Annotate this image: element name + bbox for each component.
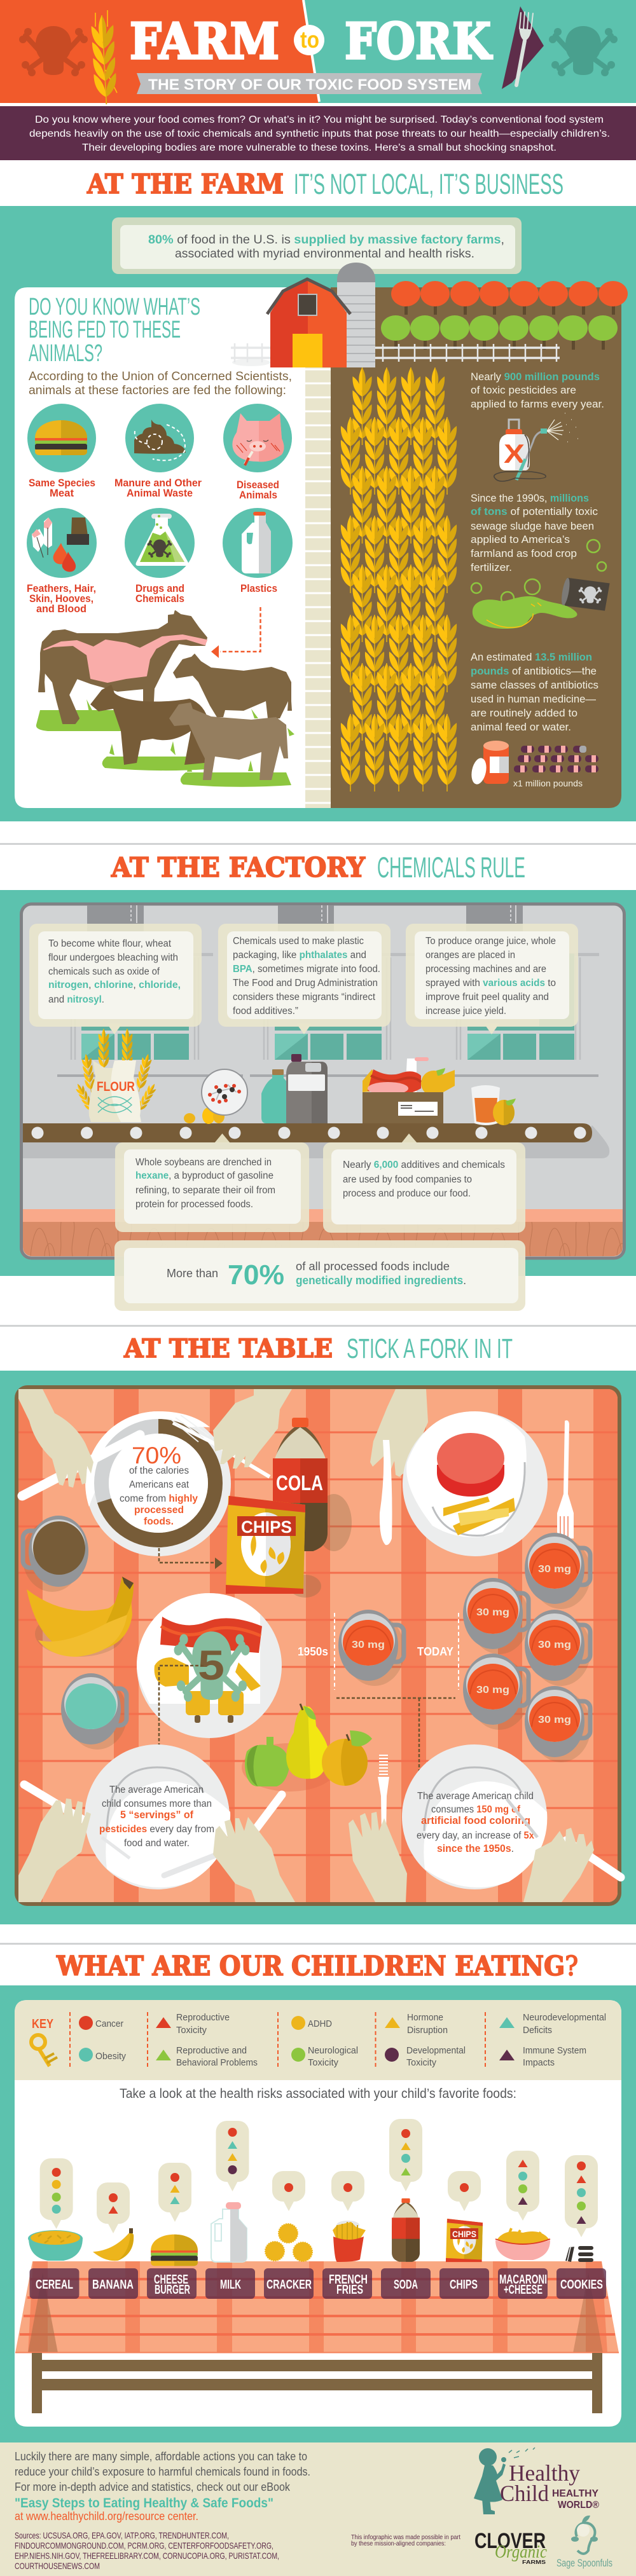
callout: 6,000 additives: Nearly 6,000 additives and chemicals bbox=[343, 1160, 505, 1170]
plate: pesticides text: child consumes more than bbox=[102, 1798, 212, 1809]
icon: hand bottom right bbox=[523, 1828, 594, 1902]
icon: today cup B bbox=[463, 1578, 529, 1654]
panel: left white bbox=[15, 287, 305, 808]
arrow: plate to pesticides bbox=[153, 1666, 204, 1781]
legend: key: Deficits bbox=[523, 2025, 552, 2036]
road strip bbox=[305, 367, 331, 808]
text: antibiotics: pounds of antibiotics—the bbox=[471, 665, 597, 677]
callout: 70 percent GMO: genetically modified ingredients. bbox=[296, 1274, 466, 1287]
table legs bbox=[32, 2353, 602, 2413]
callout: soybeans: protein for processed foods. bbox=[135, 1199, 253, 1210]
food labels: CHIPS bbox=[450, 2278, 478, 2292]
text: union of concerned scientists bbox=[29, 370, 292, 397]
food: soda bbox=[392, 2198, 420, 2262]
legend: key bbox=[15, 2000, 621, 2080]
icon: toxic barrel and slime bbox=[471, 540, 610, 629]
text: pesticides: of toxic pesticides are bbox=[471, 384, 576, 396]
heading: at the farm bbox=[86, 168, 563, 200]
food: macaroni and cheese bowl bbox=[495, 2228, 550, 2260]
callout: soybeans: Whole soybeans are drenched in bbox=[135, 1157, 272, 1168]
icon: chips bag bbox=[226, 1496, 321, 1598]
legend: key: ADHD bbox=[308, 2018, 332, 2029]
icon: hand bottom middle-right bbox=[349, 1812, 407, 1902]
food labels: FRIES bbox=[336, 2283, 363, 2297]
icon: box of food bbox=[363, 1057, 455, 1123]
legend: key: Toxicity bbox=[308, 2057, 338, 2068]
badge: to bbox=[294, 25, 324, 55]
legend: key: Impacts bbox=[523, 2057, 555, 2068]
callout: white flour: flour undergoes bleaching with bbox=[48, 952, 178, 963]
food labels bbox=[29, 2268, 606, 2299]
icon: skull left bbox=[19, 26, 88, 76]
text: union of concerned scientists: According to the Union of Concerned Scientists, bbox=[29, 370, 292, 383]
labels: row one: Animals bbox=[239, 489, 277, 501]
callout: 70 percent GMO: of all processed foods include bbox=[296, 1260, 450, 1273]
callout: orange juice: sprayed with various acids to bbox=[425, 978, 556, 989]
text: antibiotics: are routinely added to bbox=[471, 707, 577, 719]
plate: pesticides text: The average American bbox=[109, 1785, 204, 1795]
icon: plastics jug bbox=[223, 508, 293, 578]
legend: key: Behavioral Problems bbox=[176, 2057, 258, 2068]
text: take a look: Take a look at the health risks associated with your child’s favorite foods: bbox=[120, 2086, 516, 2101]
text: sewage sludge: applied to America’s bbox=[471, 533, 570, 545]
plate: food coloring text bbox=[402, 1744, 547, 1889]
tablecloth bbox=[15, 1385, 621, 1906]
text: sewage sludge bbox=[471, 492, 598, 573]
cutlery: top left plate bbox=[22, 1415, 270, 1496]
text: sources bbox=[15, 2530, 279, 2571]
icon: hand bottom middle-left bbox=[213, 1817, 295, 1902]
text: sponsors note: by these mission-aligned companies: bbox=[351, 2540, 446, 2547]
icon: today cup A bbox=[525, 1533, 591, 1609]
callout: plastic packaging: The Food and Drug Administration bbox=[233, 978, 378, 989]
icon: wheat bbox=[91, 10, 118, 105]
heading: at the factory bbox=[0, 843, 636, 884]
logo: clover organic farms: FARMS bbox=[522, 2559, 546, 2565]
text: 70 percent calories: of the calories bbox=[129, 1465, 189, 1476]
food labels: CHEESE bbox=[154, 2273, 188, 2287]
cutlery: bottom settings bbox=[24, 1755, 621, 1877]
plate: calories chart bbox=[85, 1411, 231, 1556]
logo: sage spoonfuls bbox=[556, 2516, 612, 2569]
title: FORK: FORK bbox=[345, 13, 493, 71]
food: cookies bbox=[565, 2246, 593, 2262]
plate: food coloring text: consumes 150 mg of bbox=[431, 1804, 521, 1815]
text: sources: EHP.NIEHS.NIH.GOV, THEFREELIBRARY.COM, CORNUCOPIA.ORG, PURISTAT.COM, bbox=[15, 2551, 279, 2561]
icon: feathers, hair, blood bbox=[27, 508, 97, 578]
icon: cola bottle: COLA bbox=[276, 1471, 323, 1495]
callout: plastic packaging: Chemicals used to make plastic bbox=[233, 936, 364, 947]
windows bbox=[64, 953, 599, 1060]
text: 70 percent calories: Americans eat bbox=[129, 1479, 190, 1490]
labels: row one: Animal Waste bbox=[127, 487, 193, 499]
risk bubble: cheeseburger bbox=[158, 2163, 191, 2222]
illustration: factory room bbox=[22, 904, 625, 1258]
callout: 80 percent: 80% of food in the U.S. is supplied by massive factory farms , bbox=[148, 233, 504, 247]
arrow: feed to cow bbox=[211, 607, 261, 658]
legend: key: Disruption bbox=[407, 2025, 448, 2036]
labels: row one: Meat bbox=[50, 487, 74, 499]
logo: healthy child healthy world bbox=[474, 2448, 600, 2514]
text: sponsors note: This infographic was made possible in part bbox=[351, 2533, 460, 2541]
food: cereal bowl bbox=[28, 2230, 83, 2261]
callout: white flour: To become white flour, wheat bbox=[48, 938, 172, 949]
risk bubble: french fries bbox=[331, 2171, 364, 2211]
food: cheeseburger bbox=[151, 2235, 198, 2266]
text: antibiotics: animal feed or water. bbox=[471, 721, 571, 733]
labels: row two: Chemicals bbox=[135, 593, 184, 605]
cow: large with meat diagram bbox=[39, 611, 207, 723]
risk bubble: cereal bbox=[40, 2158, 73, 2229]
callout: plastic packaging: packaging, like phthalates and bbox=[233, 950, 366, 961]
cow: right bbox=[173, 654, 292, 718]
text: antibiotics: used in human medicine— bbox=[471, 693, 596, 705]
callout: 70 percent GMO bbox=[114, 1240, 525, 1311]
icon: water cup bbox=[61, 1673, 127, 1750]
trees bbox=[381, 281, 628, 350]
heading: at the table: AT THE TABLE bbox=[123, 1334, 333, 1364]
wheat field bbox=[341, 367, 457, 791]
labels: row two bbox=[27, 582, 277, 615]
food: chips bbox=[446, 2219, 483, 2262]
text: pesticides: Nearly 900 million pounds bbox=[471, 371, 600, 383]
callout: soybeans bbox=[115, 1134, 309, 1232]
icon: skull right bbox=[549, 26, 618, 76]
text: 70 percent calories: 70% bbox=[132, 1442, 181, 1469]
risk bubble: soda bbox=[389, 2119, 422, 2191]
legend: key: KEY bbox=[32, 2017, 54, 2031]
icon: flour sack with wheat bbox=[74, 1029, 158, 1122]
callout: plastic packaging: considers these migrants “indirect bbox=[233, 992, 376, 1003]
text: 70 percent calories bbox=[120, 1442, 198, 1527]
legend: key: Neurodevelopmental bbox=[523, 2012, 606, 2023]
intro text band: depends heavily on the use of toxic chemicals and synthetic inputs that pose threats to our health—especially children’s. bbox=[29, 128, 610, 139]
food: crackers bbox=[265, 2224, 312, 2261]
food labels: MACARONI bbox=[499, 2273, 547, 2287]
text: antibiotics bbox=[471, 651, 598, 733]
badge: to: to bbox=[300, 27, 319, 53]
food labels: SODA bbox=[394, 2278, 418, 2292]
text: call to action: Luckily there are many simple, affordable actions you can take to bbox=[15, 2450, 307, 2463]
arrow: to processed foods bbox=[159, 1548, 223, 1569]
logo: clover organic farms: CLOVER bbox=[474, 2529, 546, 2553]
panel: factory background bbox=[0, 890, 636, 1276]
text: pesticides bbox=[471, 371, 604, 410]
text: sources: COURTHOUSENEWS.COM bbox=[15, 2561, 100, 2571]
text: call to action bbox=[15, 2450, 310, 2523]
labels: row one: Manure and Other bbox=[114, 477, 202, 489]
callout: 6,000 additives: process and produce our food. bbox=[343, 1188, 471, 1199]
risk bubble: cookies bbox=[565, 2155, 598, 2237]
food labels: BURGER bbox=[155, 2283, 190, 2297]
food labels: COOKIES bbox=[560, 2278, 603, 2292]
icon: hand top right bbox=[370, 1389, 428, 1477]
text: sewage sludge: sewage sludge have been bbox=[471, 520, 594, 532]
food labels: BANANA bbox=[92, 2278, 134, 2292]
callout: plastic packaging bbox=[218, 924, 391, 1034]
text: 70 percent calories: foods. bbox=[144, 1516, 174, 1527]
callout: orange juice: To produce orange juice, whole bbox=[425, 936, 556, 947]
arrow: cups to food coloring bbox=[336, 1698, 455, 1786]
risk bubble: chips bbox=[448, 2171, 481, 2211]
icon: chemical jugs bbox=[261, 1054, 328, 1123]
illustration: cows on grass bbox=[36, 611, 294, 787]
panel: white card bbox=[15, 2000, 621, 2427]
legend: key: Reproductive and bbox=[176, 2045, 247, 2056]
icon: today cup C bbox=[525, 1610, 591, 1686]
text: call to action: reduce your child’s exposure to harmful chemicals found in foods. bbox=[15, 2465, 310, 2478]
labels: row one bbox=[29, 477, 279, 501]
text: sewage sludge: of tons of potentially toxic bbox=[471, 505, 598, 517]
logo: clover organic farms bbox=[474, 2529, 547, 2565]
plate: pesticides text: 5 “servings” of bbox=[120, 1809, 193, 1821]
legend: key: Hormone bbox=[407, 2012, 443, 2023]
legend: key: Developmental bbox=[406, 2045, 466, 2056]
heading: at the table: STICK A FORK IN IT bbox=[347, 1333, 513, 1364]
labels: row two: Drugs and bbox=[135, 582, 184, 594]
callout: soybeans: hexane, a byproduct of gasoline bbox=[135, 1170, 273, 1181]
heading: at the factory: CHEMICALS RULE bbox=[377, 851, 525, 884]
callout: 80 percent: associated with myriad environmental and health risks. bbox=[175, 247, 474, 261]
icon: same species meat bbox=[27, 404, 96, 472]
callout: 80 percent bbox=[112, 217, 522, 274]
conveyor belt bbox=[23, 1123, 592, 1142]
icon: pill bottle and pills bbox=[469, 741, 598, 786]
callout: white flour bbox=[29, 924, 202, 1034]
plate: burger and fries bbox=[403, 1411, 548, 1556]
heading: at the table bbox=[0, 1325, 636, 1364]
subtitle ribbon: THE STORY OF OUR TOXIC FOOD SYSTEM bbox=[148, 76, 471, 93]
labels: row two: and Blood bbox=[36, 603, 86, 615]
plate: pesticides text: food and water. bbox=[124, 1838, 190, 1849]
logo: healthy child healthy world: WORLD® bbox=[558, 2500, 600, 2511]
logo: sage spoonfuls: Sage Spoonfuls bbox=[556, 2557, 612, 2569]
icon: bananas bbox=[27, 1577, 134, 1657]
labels: row two: Plastics bbox=[240, 582, 277, 594]
callout: white flour: and nitrosyl. bbox=[48, 994, 104, 1005]
panel: farm background bbox=[0, 206, 636, 821]
callout: orange juice: increase juice yield. bbox=[425, 1006, 506, 1017]
text: call to action: For more in-depth advice and statistics, check out our eBook bbox=[15, 2481, 291, 2493]
food: milk bbox=[211, 2202, 247, 2262]
callout: orange juice bbox=[406, 924, 578, 1034]
logo: clover organic farms: Organic bbox=[495, 2542, 547, 2562]
icon: 1950s cup: 30 mg bbox=[352, 1640, 385, 1650]
text: 70 percent calories: processed bbox=[134, 1505, 184, 1516]
text: sources: Sources: UCSUSA.ORG, EPA.GOV, IATP.ORG, TRENDHUNTER.COM, bbox=[15, 2530, 229, 2540]
icon: today cup E: 30 mg bbox=[538, 1715, 571, 1725]
title: FARM: FARM bbox=[130, 13, 279, 71]
logo: healthy child healthy world: HEALTHY bbox=[552, 2488, 599, 2499]
callout: white flour: nitrogen, chlorine, chloride, bbox=[48, 980, 181, 990]
panel: table background bbox=[0, 1371, 636, 1924]
legend: key: Obesity bbox=[95, 2051, 126, 2062]
heading: feed question: BEING FED TO THESE bbox=[29, 317, 181, 343]
cow: middle bbox=[90, 685, 209, 765]
text: sewage sludge: fertilizer. bbox=[471, 561, 512, 573]
intro text band: Do you know where your food comes from? Or what’s in it? You might be surprised. Today’s conventional food system bbox=[35, 114, 604, 125]
icon: today cup C: 30 mg bbox=[538, 1640, 571, 1650]
icon: hand top left bbox=[18, 1389, 93, 1488]
risk bubble: banana bbox=[97, 2182, 130, 2233]
legend: key: Immune System bbox=[523, 2045, 586, 2056]
icon: molecule circle and soybeans bbox=[184, 1069, 247, 1124]
icon: cola bottle bbox=[273, 1418, 352, 1551]
icon: today cup D: 30 mg bbox=[476, 1685, 509, 1696]
risk bubble: cracker bbox=[272, 2171, 305, 2211]
food: banana bbox=[93, 2228, 134, 2261]
callout: orange juice: improve fruit peel quality and bbox=[425, 992, 549, 1003]
risk bubble: macaroni and cheese bbox=[506, 2151, 539, 2221]
logo: healthy child healthy world: Child bbox=[500, 2481, 549, 2506]
icon: drugs and chemicals flask bbox=[125, 508, 195, 578]
panel: children's section background bbox=[0, 1985, 636, 2442]
plate: five servings bbox=[137, 1593, 282, 1738]
icon: flour sack with wheat: FLOUR bbox=[97, 1079, 135, 1094]
plate: food coloring text: The average American child bbox=[417, 1791, 534, 1802]
icon: pesticide sprayer bbox=[494, 413, 578, 481]
labels: row one: Diseased bbox=[237, 479, 279, 491]
plate: food coloring text: every day, an increase of 5x bbox=[417, 1830, 534, 1841]
silo bbox=[337, 263, 375, 367]
plate: pesticides text: pesticides every day from bbox=[99, 1824, 214, 1835]
legend: key: Cancer bbox=[95, 2018, 123, 2029]
legend: key: Neurological bbox=[308, 2045, 358, 2056]
callout: plastic packaging: food additives.” bbox=[233, 1006, 298, 1017]
heading: feed question: DO YOU KNOW WHAT’S bbox=[29, 294, 200, 320]
text: union of concerned scientists: animals at these factories are fed the following: bbox=[29, 384, 286, 397]
callout: 6,000 additives bbox=[323, 1134, 525, 1233]
legend: key: Toxicity bbox=[176, 2025, 207, 2036]
cow: front light bbox=[169, 702, 288, 780]
icon: today cup D bbox=[463, 1654, 529, 1730]
text: sponsors note bbox=[351, 2533, 460, 2547]
icon: manure bbox=[125, 404, 194, 472]
heading: feed question: ANIMALS? bbox=[29, 340, 102, 367]
icon: diseased pig bbox=[223, 404, 292, 472]
icon: today cup B: 30 mg bbox=[476, 1607, 509, 1618]
callout: 70 percent GMO: 70% bbox=[228, 1259, 284, 1291]
text: call to action: at www.healthychild.org/resource center. bbox=[15, 2510, 198, 2523]
cutlery: knife and fork right plate bbox=[380, 1420, 574, 1545]
plate: food coloring text: since the 1950s. bbox=[437, 1843, 514, 1854]
heading: what are our children eating bbox=[0, 1943, 636, 1982]
fence bbox=[231, 343, 560, 366]
legend: key: Toxicity bbox=[406, 2057, 436, 2068]
heading: at the factory: AT THE FACTORY bbox=[111, 852, 366, 883]
callout: orange juice: oranges are placed in bbox=[425, 950, 515, 961]
labels: 1950s and today: TODAY bbox=[417, 1645, 453, 1658]
icon: hand bottom left bbox=[18, 1798, 91, 1902]
food labels: +CHEESE bbox=[504, 2283, 543, 2297]
icon: today cup A: 30 mg bbox=[538, 1564, 571, 1575]
food: french fries bbox=[333, 2221, 366, 2262]
icon: juice and orange bbox=[471, 1085, 516, 1125]
icon: pepper, pear and orange bbox=[242, 1704, 372, 1792]
food: chips: CHIPS bbox=[452, 2229, 476, 2239]
labels: row one: Same Species bbox=[29, 477, 95, 489]
legend: pill scale: x1 million pounds bbox=[513, 778, 583, 788]
food labels: CEREAL bbox=[36, 2278, 73, 2292]
text: call to action: "Easy Steps to Eating Healthy & Safe Foods" bbox=[15, 2496, 273, 2511]
header band bbox=[0, 0, 636, 105]
intro text band bbox=[0, 106, 636, 160]
text: antibiotics: same classes of antibiotics bbox=[471, 679, 598, 691]
text: pesticides: applied to farms every year. bbox=[471, 398, 604, 410]
logo: healthy child healthy world: Healthy bbox=[509, 2460, 580, 2486]
icon: coffee cup bbox=[22, 1516, 88, 1592]
heading: what are our children eating: WHAT ARE OUR CHILDREN EATING? bbox=[56, 1950, 578, 1982]
callout: plastic packaging: BPA, sometimes migrate into food. bbox=[233, 964, 380, 975]
food labels: CRACKER bbox=[266, 2278, 312, 2292]
callout: orange juice: processing machines and are bbox=[425, 964, 546, 975]
text: sewage sludge: Since the 1990s, millions bbox=[471, 492, 589, 504]
food labels: FRENCH bbox=[329, 2273, 368, 2287]
plate: five servings: 5 bbox=[198, 1641, 225, 1689]
plate: pesticides text bbox=[85, 1744, 230, 1889]
labels: 1950s and today: 1950s bbox=[298, 1645, 328, 1658]
labels: row two: Feathers, Hair, bbox=[27, 582, 96, 594]
heading: feed question bbox=[29, 294, 200, 367]
icon: today cup E bbox=[525, 1686, 591, 1762]
icon: chips bag: CHIPS bbox=[241, 1518, 292, 1537]
text: antibiotics: An estimated 13.5 million bbox=[471, 651, 592, 663]
legend: key: Reproductive bbox=[176, 2012, 230, 2023]
callout: 70 percent GMO: More than bbox=[167, 1267, 218, 1280]
icon: pesticide sprayer: X bbox=[504, 439, 525, 469]
tablecloth: display table bbox=[15, 2261, 619, 2353]
icon: hand top middle bbox=[213, 1389, 292, 1469]
heading: at the farm: AT THE FARM bbox=[86, 168, 284, 200]
panel: footer bbox=[0, 2442, 636, 2576]
plate: food coloring text: artificial food coloring bbox=[421, 1814, 530, 1826]
intro text band: Their developing bodies are more vulnerable to these toxins. Here’s a small but shocking snapshot. bbox=[82, 142, 556, 153]
risk bubble: milk bbox=[216, 2121, 249, 2191]
text: 70 percent calories: come from highly bbox=[120, 1493, 198, 1504]
callout: white flour: chemicals such as oxide of bbox=[48, 966, 160, 977]
labels: row two: Skin, Hooves, bbox=[29, 593, 93, 605]
labels: 1950s and today bbox=[298, 1613, 459, 1690]
icon: fork and napkin bbox=[502, 6, 544, 89]
panel: right brown field bbox=[331, 287, 621, 808]
icon: 1950s cup bbox=[338, 1610, 404, 1686]
callout: soybeans: refining, to separate their oil from bbox=[135, 1185, 275, 1196]
food labels: MILK bbox=[220, 2278, 241, 2292]
text: sources: FINDOURCOMMONGROUND.COM, PCRM.ORG, CENTERFORFOODSAFETY.ORG, bbox=[15, 2540, 273, 2551]
text: sewage sludge: farmland as food crop bbox=[471, 547, 577, 559]
callout: 6,000 additives: are used by food companies to bbox=[343, 1174, 472, 1185]
barn bbox=[267, 279, 350, 367]
